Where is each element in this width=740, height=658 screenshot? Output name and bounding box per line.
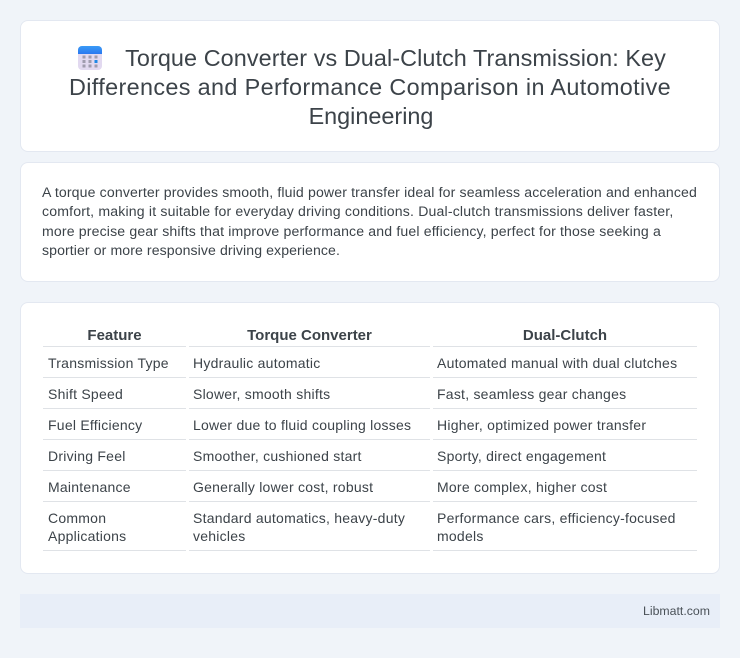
row: maintenance: More complex, higher cost: [437, 479, 607, 495]
row: fuel efficiency: [48, 417, 646, 433]
row: shift speed: Shift Speed: [48, 386, 123, 402]
summary text: [42, 184, 697, 258]
row: common applications: models: [437, 528, 484, 544]
table header: Feature: [87, 327, 142, 344]
row: common applications: Common: [48, 510, 106, 526]
row: common applications: Standard automatics, heavy-duty: [193, 510, 405, 526]
row: fuel efficiency: Higher, optimized power transfer: [437, 417, 646, 433]
row: common applications: [48, 510, 676, 544]
row: shift speed: Fast, seamless gear changes: [437, 386, 626, 402]
row: transmission type: Hydraulic automatic: [193, 355, 320, 371]
footer text: Libmatt.com: Libmatt.com: [643, 604, 710, 618]
row: common applications: Performance cars, efficiency-focused: [437, 510, 676, 526]
summary text: sportier or more responsive driving experience.: [42, 242, 340, 258]
footer: [20, 594, 720, 628]
row: common applications: Applications: [48, 528, 126, 544]
row: transmission type: Automated manual with dual clutches: [437, 355, 677, 371]
row: shift speed: [48, 386, 626, 402]
panel: title: [20, 20, 720, 152]
row: maintenance: Generally lower cost, robust: [193, 479, 373, 495]
title text: [69, 45, 671, 129]
title text: Torque Converter vs Dual-Clutch Transmission: Key: [125, 45, 666, 71]
table header: Torque Converter: [247, 327, 372, 344]
row: maintenance: [48, 479, 607, 495]
icon: calendar: [78, 46, 102, 70]
title text: Engineering: [309, 103, 433, 129]
summary text: A torque converter provides smooth, fluid power transfer ideal for seamless acceleration and enhanced: [42, 184, 697, 200]
table header: [87, 327, 607, 344]
row: driving feel: [48, 448, 606, 464]
row: maintenance: Maintenance: [48, 479, 131, 495]
summary text: more precise gear shifts that improve performance and fuel efficiency, perfect for those seeking a: [42, 222, 661, 238]
row: fuel efficiency: Fuel Efficiency: [48, 417, 142, 433]
row: shift speed: Slower, smooth shifts: [193, 386, 330, 402]
summary text: comfort, making it suitable for everyday driving conditions. Dual-clutch transmissions deliver faster,: [42, 203, 673, 219]
panel: summary: [20, 162, 720, 282]
row: driving feel: Sporty, direct engagement: [437, 448, 606, 464]
panel: comparison table: [20, 302, 720, 574]
title text: Differences and Performance Comparison in Automotive: [69, 74, 671, 100]
row: transmission type: Transmission Type: [48, 355, 169, 371]
table header: Dual-Clutch: [523, 327, 607, 344]
row: driving feel: Driving Feel: [48, 448, 126, 464]
row: driving feel: Smoother, cushioned start: [193, 448, 362, 464]
row: transmission type: [48, 355, 677, 371]
row: fuel efficiency: Lower due to fluid coupling losses: [193, 417, 411, 433]
row: common applications: vehicles: [193, 528, 246, 544]
